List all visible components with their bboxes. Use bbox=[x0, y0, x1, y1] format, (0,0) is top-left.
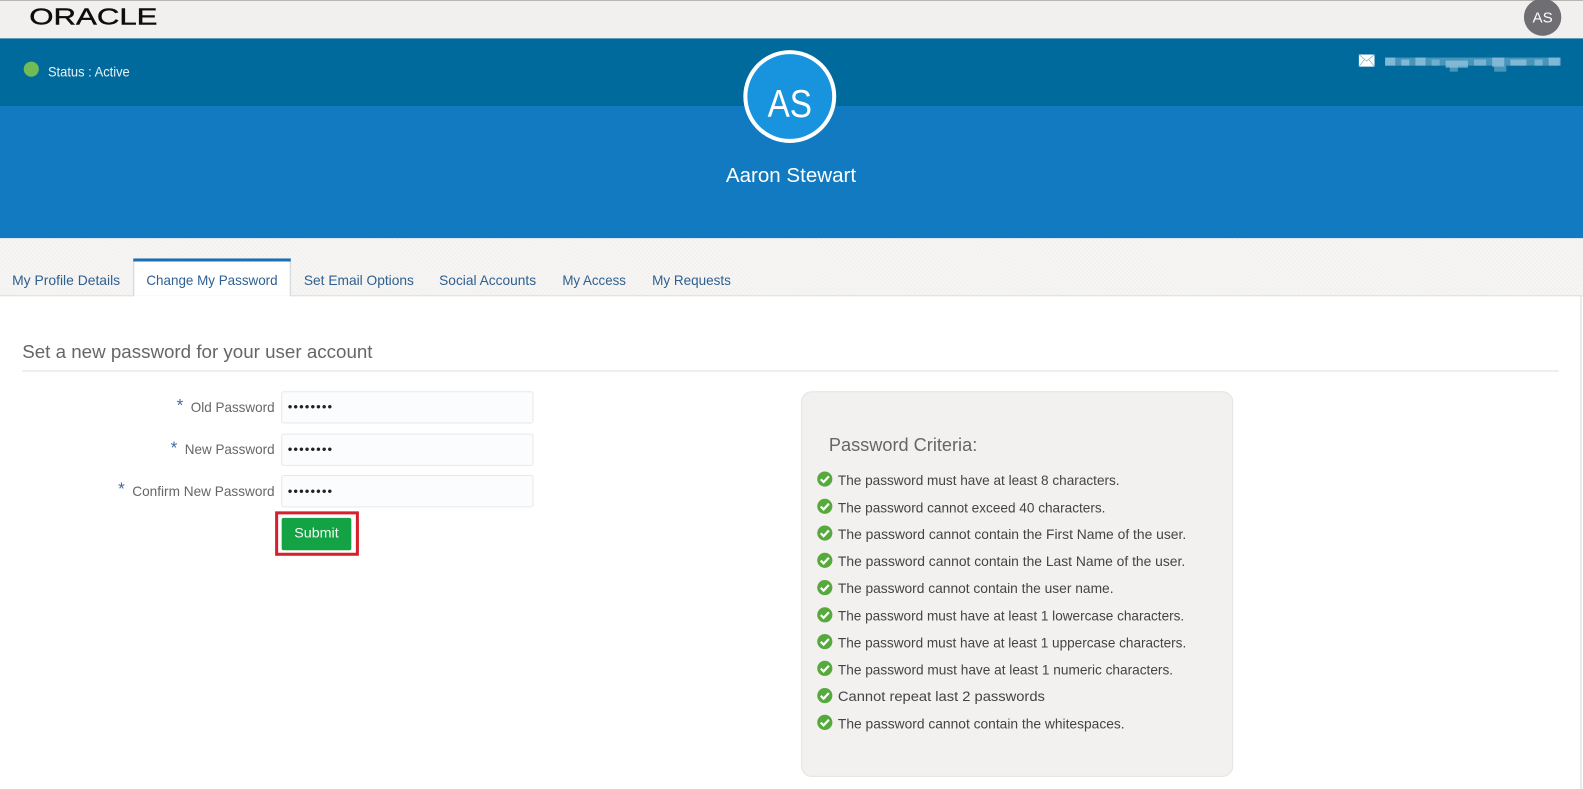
user avatar small bbox=[1524, 0, 1561, 36]
avatar large bbox=[745, 52, 834, 141]
tab: My Requests: My Requests bbox=[652, 272, 731, 288]
field: new password: * bbox=[171, 437, 178, 457]
status indicator: Status : Active bbox=[48, 65, 130, 80]
tab: Set Email Options: Set Email Options bbox=[304, 272, 414, 288]
form: change password bbox=[118, 392, 533, 554]
avatar large: AS bbox=[768, 82, 812, 126]
tab: My Profile Details: My Profile Details bbox=[12, 272, 120, 288]
panel: password criteria bbox=[802, 392, 1233, 776]
blurred email address bbox=[1385, 58, 1561, 72]
field: old password: •••••••• bbox=[288, 399, 333, 414]
field: new password: New Password bbox=[185, 441, 275, 457]
field: new password: •••••••• bbox=[288, 441, 333, 456]
profile banner bbox=[0, 38, 1583, 238]
field: new password bbox=[171, 434, 533, 465]
icon: envelope bbox=[1359, 55, 1375, 67]
criterion 3: The password cannot contain the First Name of the user. bbox=[838, 527, 1186, 542]
top bar bbox=[0, 0, 1583, 38]
user avatar small: AS bbox=[1533, 10, 1553, 27]
criterion 10: The password cannot contain the whitespaces. bbox=[838, 716, 1125, 731]
field: confirm new password bbox=[118, 476, 533, 507]
field: old password: * bbox=[177, 395, 184, 415]
active tab: Change My Password: Change My Password bbox=[146, 272, 278, 288]
criterion 1: The password must have at least 8 characters. bbox=[838, 473, 1120, 488]
field: confirm new password: * bbox=[118, 479, 125, 499]
criterion 2: The password cannot exceed 40 characters. bbox=[838, 500, 1105, 515]
tab bar bbox=[0, 238, 1583, 298]
criterion 8: The password must have at least 1 numeric characters. bbox=[838, 662, 1173, 677]
criterion 4: The password cannot contain the Last Name of the user. bbox=[838, 554, 1185, 569]
criterion 9: Cannot repeat last 2 passwords bbox=[838, 689, 1045, 704]
status indicator bbox=[24, 62, 130, 80]
user name: Aaron Stewart bbox=[726, 164, 856, 187]
logo: Oracle: ORACLE bbox=[29, 4, 157, 30]
criterion 5: The password cannot contain the user name. bbox=[838, 581, 1114, 596]
submit button with red highlight: Submit bbox=[294, 525, 339, 541]
submit button with red highlight bbox=[277, 513, 357, 554]
field: confirm new password: Confirm New Password bbox=[132, 483, 275, 499]
field: old password: Old Password bbox=[191, 399, 275, 415]
tab: My Access: My Access bbox=[562, 272, 626, 288]
section heading: Set a new password for your user account bbox=[22, 341, 373, 362]
panel heading: Password Criteria: bbox=[829, 434, 977, 455]
content right border bbox=[1580, 296, 1581, 789]
active tab: Change My Password bbox=[133, 258, 291, 298]
field: confirm new password: •••••••• bbox=[288, 484, 333, 499]
criterion 6: The password must have at least 1 lowercase characters. bbox=[838, 608, 1184, 623]
tab: Social Accounts: Social Accounts bbox=[439, 272, 536, 288]
field: old password bbox=[177, 392, 533, 423]
criterion 7: The password must have at least 1 uppercase characters. bbox=[838, 636, 1186, 651]
